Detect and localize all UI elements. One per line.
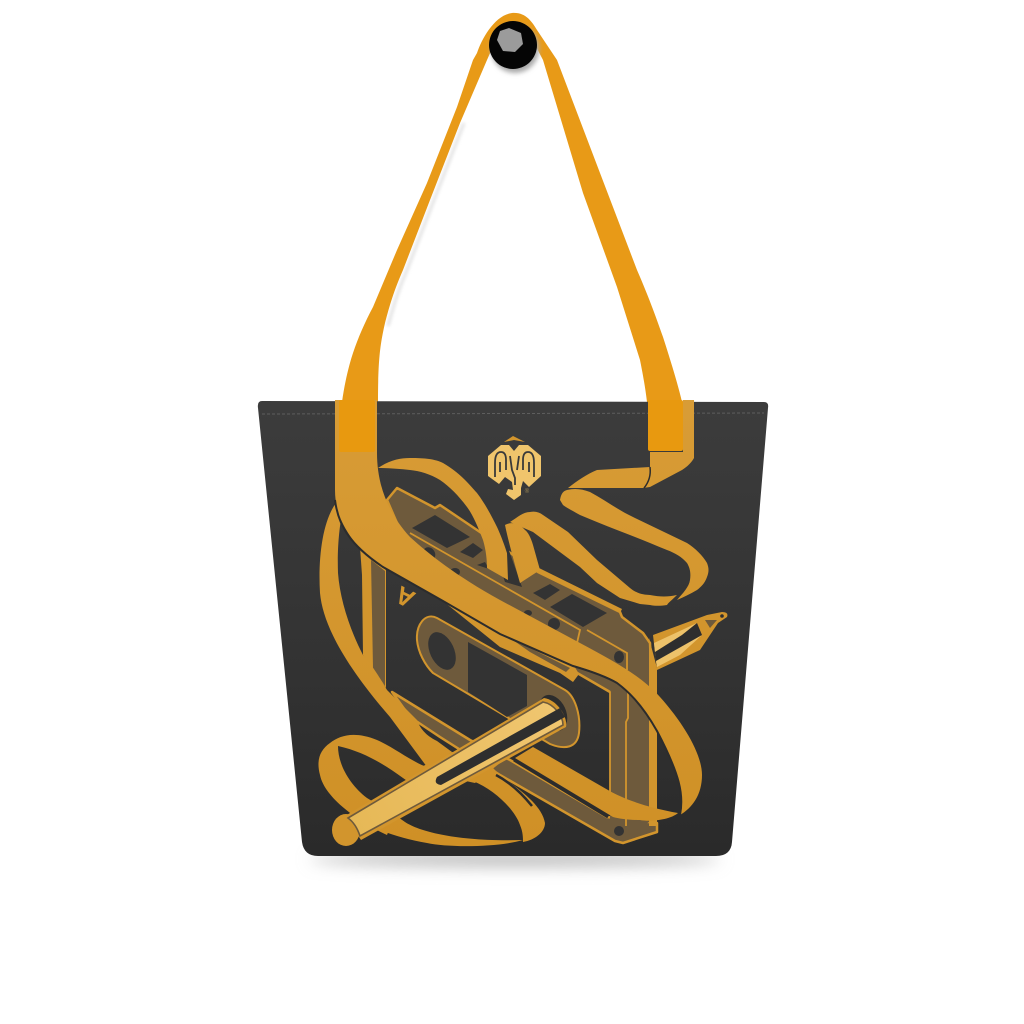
- fold shadow: [644, 467, 650, 488]
- bag body: [258, 401, 768, 856]
- right handle tab: [648, 400, 683, 451]
- curl ribbon: [505, 512, 677, 606]
- top arc ribbon: [378, 458, 508, 580]
- cassette top band: [387, 488, 652, 692]
- thin wedge under main ribbon: [438, 597, 579, 682]
- logo mark: [488, 436, 541, 500]
- pencil tip at back: [653, 612, 727, 670]
- ribbon connector behind pencil: [415, 752, 500, 783]
- lower diagonal ribbon: [514, 747, 678, 821]
- cassette left edge: [360, 547, 386, 688]
- cassette gold detail line: [410, 533, 627, 670]
- cassette centre label: [417, 617, 579, 747]
- cassette bottom edge: [392, 692, 657, 843]
- lower loop ribbon: [318, 735, 427, 835]
- pencil hole: [533, 690, 573, 736]
- cassette right edge: [572, 638, 657, 836]
- wall peg shadow: [491, 25, 539, 73]
- wall peg: [489, 21, 537, 69]
- main ribbon from left handle: [335, 400, 702, 815]
- main ribbon shadow line: [335, 500, 681, 815]
- handle straps: [342, 13, 682, 402]
- ribbon fold at right handle: [568, 400, 694, 488]
- left handle tab: [339, 400, 375, 452]
- bottom ribbon: [360, 815, 523, 846]
- top hem stitching: [262, 413, 764, 414]
- pencil shaft: [345, 698, 566, 840]
- strap soft shadow: [388, 123, 464, 326]
- cassette dark windows and screw holes: [412, 515, 624, 836]
- long S ribbon: [560, 489, 708, 600]
- artwork: cassette and ribbons: [318, 400, 727, 846]
- side A letter: A: [391, 580, 420, 613]
- pencil butt end: [332, 814, 360, 846]
- cassette top gold edge: [538, 570, 621, 611]
- bag drop shadow: [310, 852, 720, 866]
- logo mark: ®: [525, 488, 530, 495]
- left sweeping ribbon: [320, 503, 452, 767]
- crescent ribbon fold: [473, 765, 545, 842]
